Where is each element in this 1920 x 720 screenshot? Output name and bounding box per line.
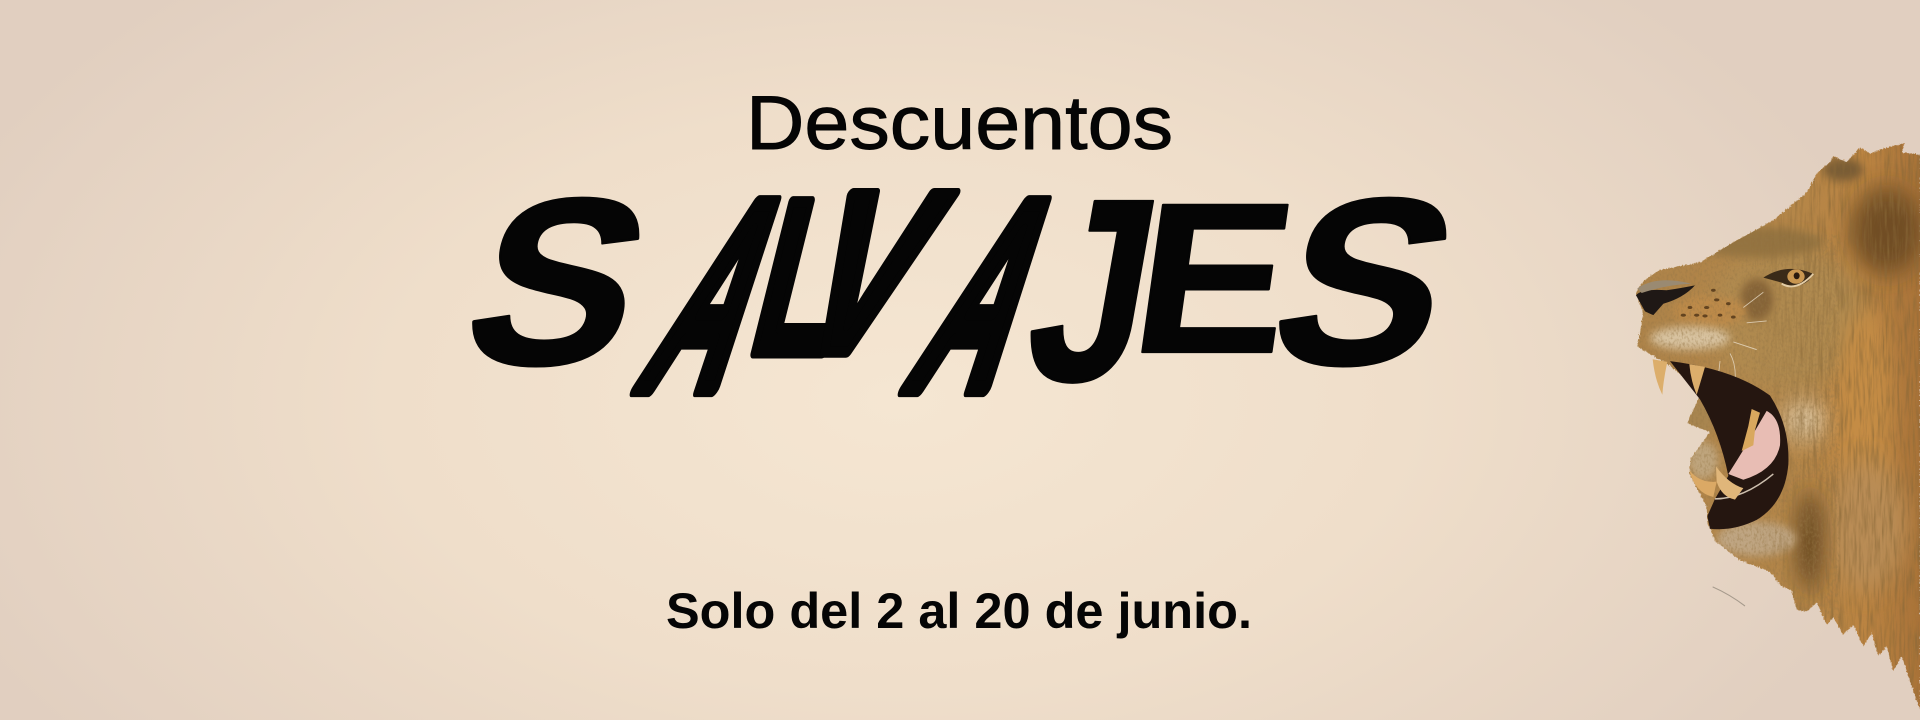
whiskers	[1717, 292, 1767, 392]
tagline: Solo del 2 al 20 de junio.: Solo del 2 al 20 de junio.	[666, 583, 1252, 639]
heading: Descuentos: Descuentos	[746, 81, 1173, 166]
title: SALVAJES: A	[604, 146, 837, 447]
mouth interior	[1670, 361, 1788, 529]
lower lip highlight	[1715, 474, 1773, 499]
title: SALVAJES: S	[1248, 150, 1483, 415]
eye	[1763, 269, 1813, 286]
upper fang rear	[1689, 364, 1705, 395]
title: SALVAJES: E	[1121, 159, 1307, 398]
title: SALVAJES: A	[872, 145, 1109, 447]
lower incisor curve	[1689, 470, 1717, 497]
title: SALVAJES	[441, 145, 1483, 447]
lower fang	[1716, 466, 1743, 500]
illustration: roaring lion	[1633, 143, 1920, 717]
nose	[1636, 280, 1695, 315]
title: SALVAJES: L	[733, 154, 877, 400]
upper fang front	[1653, 359, 1667, 395]
whisker hair	[1713, 587, 1745, 606]
tongue	[1728, 411, 1780, 480]
title: SALVAJES: V	[762, 145, 978, 401]
lion shading and texture	[1633, 143, 1920, 717]
title: SALVAJES: J	[1010, 146, 1177, 436]
lion fur silhouette	[1636, 143, 1920, 709]
title: SALVAJES: S	[441, 150, 676, 415]
muzzle whisker spots	[1681, 289, 1736, 319]
back teeth	[1742, 409, 1760, 451]
